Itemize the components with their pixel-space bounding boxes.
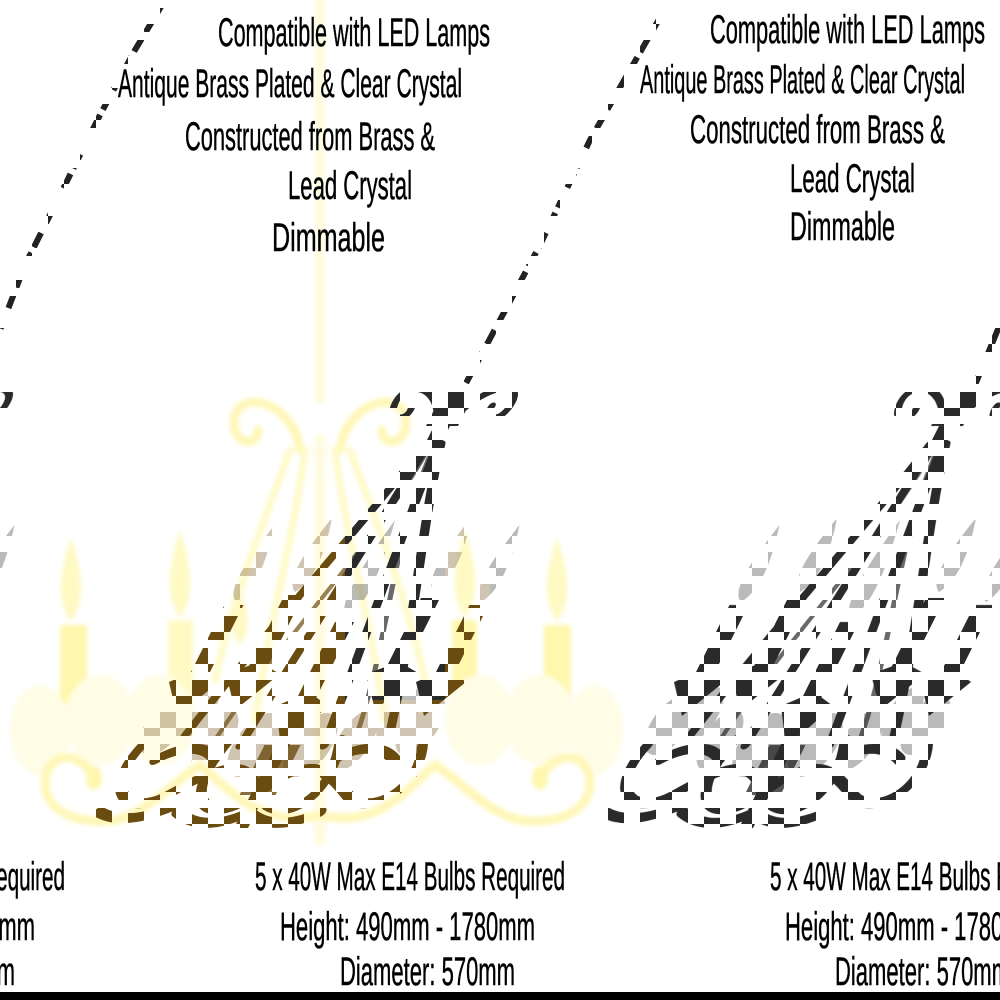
feature list left: Antique Brass Plated & Clear Crystal bbox=[118, 62, 462, 106]
ghost chandelier in pale yellow bbox=[10, 0, 623, 840]
bottom black bar bbox=[0, 992, 1000, 1000]
ghost crown scrolls bbox=[234, 402, 406, 450]
feature list left: Constructed from Brass & bbox=[185, 115, 435, 159]
specifications centre: Diameter: 570mm bbox=[340, 950, 515, 994]
feature list left: Lead Crystal bbox=[288, 164, 412, 208]
specifications centre: 5 x 40W Max E14 Bulbs Required bbox=[255, 855, 565, 899]
ghost candles bbox=[60, 530, 571, 705]
specifications left edge bbox=[0, 855, 65, 994]
specifications centre: Height: 490mm - 1780mm bbox=[280, 905, 535, 949]
right chandelier bbox=[596, 386, 1000, 828]
specifications centre bbox=[255, 855, 565, 994]
ghost arms bbox=[215, 440, 425, 840]
far-left chandelier edge bbox=[0, 392, 14, 568]
ghost chain bbox=[315, 0, 325, 400]
centre chain bbox=[465, 0, 670, 385]
ghost crystal clusters bbox=[10, 675, 623, 775]
feature list left bbox=[118, 11, 490, 260]
feature list right: Dimmable bbox=[790, 205, 895, 249]
centre chandelier gold part bbox=[96, 520, 490, 828]
specifications right bbox=[770, 855, 1000, 994]
right chain bbox=[975, 300, 1000, 385]
feature list right bbox=[640, 8, 985, 249]
feature list left: Compatible with LED Lamps bbox=[218, 11, 490, 55]
centre chandelier grey part bbox=[91, 386, 614, 828]
left chain bbox=[0, 0, 165, 330]
ghost lower scrolls bbox=[45, 757, 590, 821]
feature list left: Dimmable bbox=[272, 216, 385, 260]
